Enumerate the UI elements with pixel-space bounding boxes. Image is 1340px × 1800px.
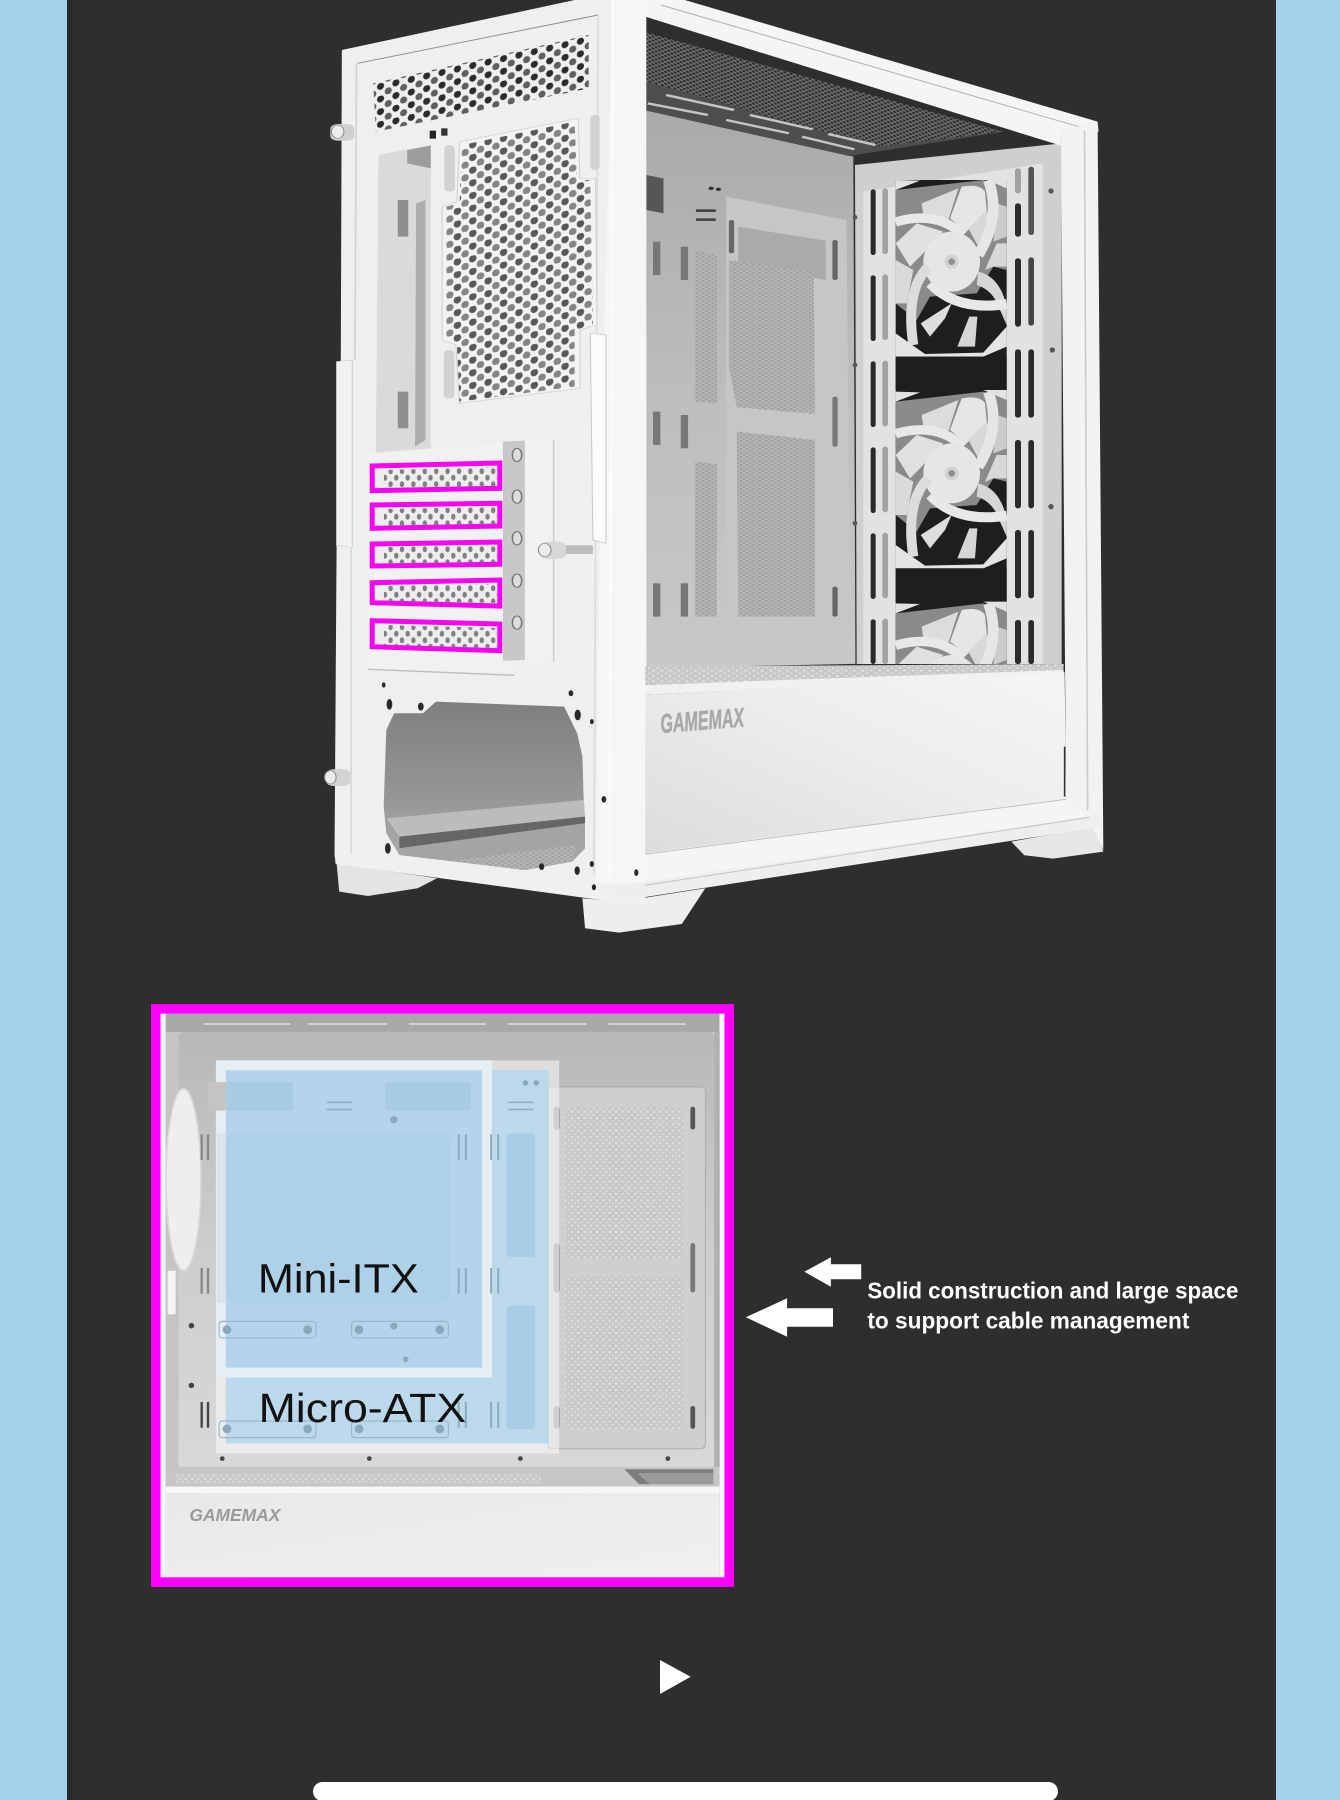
case interior side view — [161, 1014, 724, 1577]
front fan bracket with three fans — [852, 144, 1062, 664]
fan 1 — [896, 177, 1007, 357]
Mini-ITX zone — [216, 1060, 492, 1378]
PCI slot covers highlighted in magenta — [372, 463, 500, 651]
floor and shroud — [166, 1467, 719, 1577]
PSU opening — [384, 702, 585, 870]
GAMEMAX logo on shroud: GAMEMAX — [659, 702, 746, 739]
white bottom bar — [313, 1782, 1058, 1800]
label: Mini-ITX: Mini-ITX — [258, 1255, 419, 1301]
panel: motherboard size view with magenta frame — [151, 1004, 734, 1587]
side fan — [166, 1089, 201, 1314]
fan 2 — [896, 388, 1007, 568]
callout text: to support cable management — [867, 1308, 1190, 1334]
thumbscrew upper left — [330, 124, 354, 141]
GAMEMAX logo: GAMEMAX — [189, 1505, 282, 1525]
label: Micro-ATX: Micro-ATX — [259, 1385, 466, 1431]
expansion slots bracket — [325, 333, 638, 890]
Micro-ATX zone — [216, 1060, 559, 1453]
icon: play triangle — [660, 1660, 691, 1694]
arrow: lower — [746, 1298, 833, 1337]
arrow: upper — [804, 1257, 861, 1287]
callout text: Solid construction and large space — [867, 1278, 1238, 1304]
top vent mesh — [373, 35, 589, 132]
rear panel — [330, 0, 646, 889]
handle — [590, 333, 606, 543]
bottom shroud — [609, 664, 1103, 901]
callout text — [867, 1278, 1238, 1334]
motherboard tray details — [189, 1080, 670, 1461]
main vent mesh — [442, 118, 597, 403]
thumbscrew lower left — [325, 769, 350, 786]
expansion side opening — [376, 115, 600, 457]
top mesh and slots — [646, 32, 1003, 156]
product image: white PC case, rear three-quarter view — [325, 0, 1103, 933]
fan 3 — [896, 600, 1007, 664]
rear mesh plate — [547, 1087, 705, 1449]
case feet and base strip — [335, 827, 1103, 933]
top rail and right pillar — [635, 0, 1103, 850]
thumbscrew by slots — [538, 542, 593, 559]
interior of the case — [645, 110, 855, 668]
